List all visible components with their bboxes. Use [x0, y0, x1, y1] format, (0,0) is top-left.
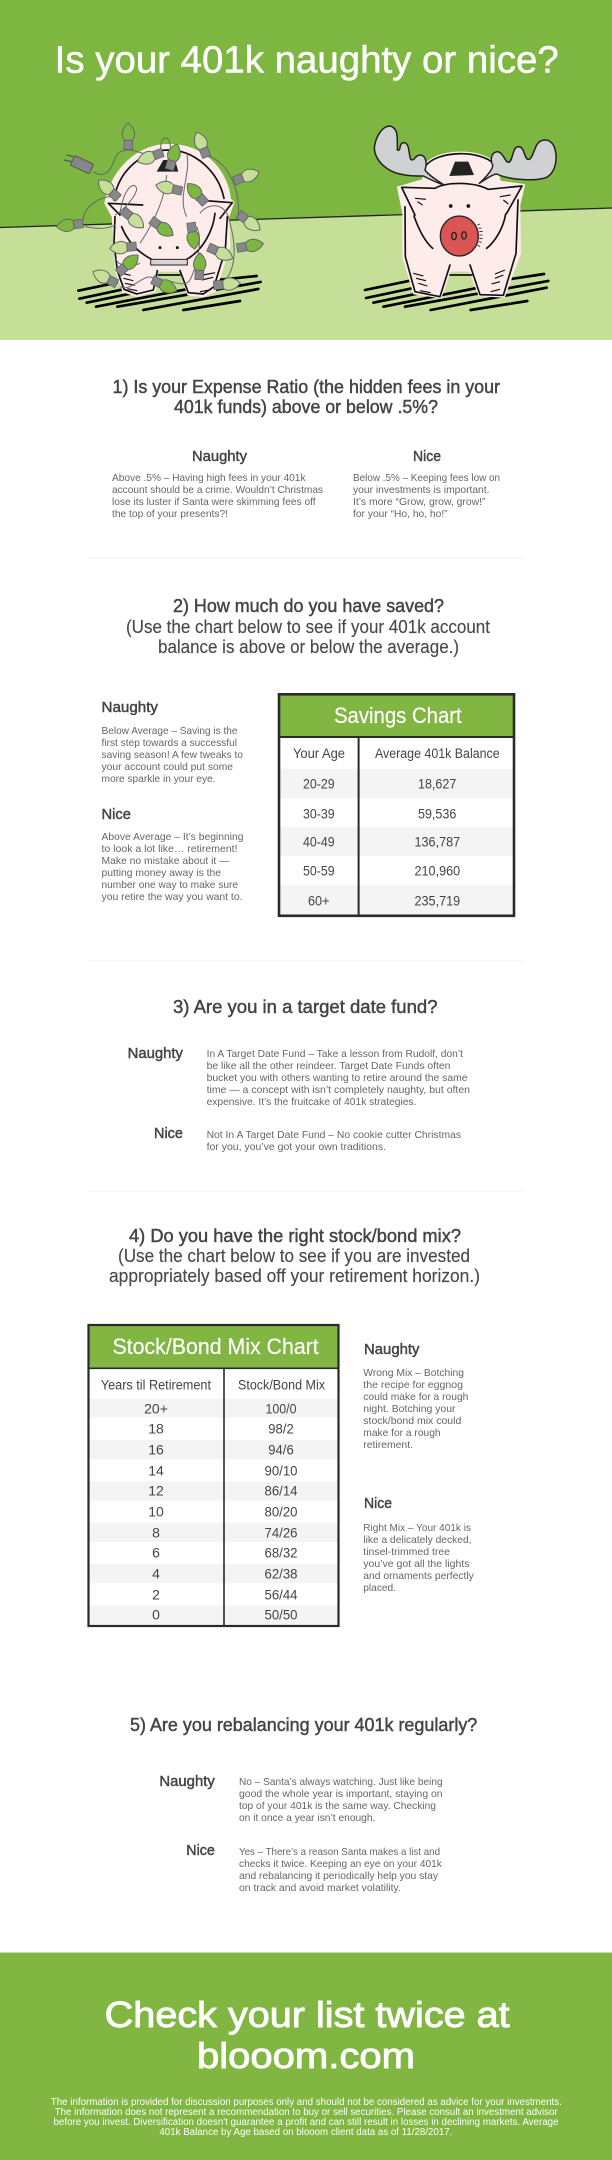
icon: piggy bank reindeer (nice) — [365, 126, 556, 310]
savings chart table: 50-59 — [303, 863, 335, 879]
light wires — [83, 138, 238, 288]
savings chart table: 210,960 — [414, 863, 460, 879]
naughty text: make for a rough — [363, 1428, 441, 1439]
naughty row: In A Target Date Fund – Take a lesson from Rudolf, don’t — [207, 1049, 463, 1060]
shadow hatching — [78, 276, 261, 310]
heading 4: (Use the chart below to see if you are invested — [118, 1245, 470, 1266]
section 2 — [102, 595, 514, 916]
savings chart table — [278, 694, 514, 916]
stock/bond mix chart table: 2 — [152, 1587, 160, 1603]
heading 1: 1) Is your Expense Ratio (the hidden fees in your — [112, 376, 500, 397]
heading 4: 4) Do you have the right stock/bond mix? — [129, 1225, 461, 1246]
call to action — [105, 1994, 510, 2076]
savings chart table: Savings Chart — [334, 703, 462, 728]
stock/bond mix chart table: Stock/Bond Mix — [238, 1378, 325, 1392]
naughty text: the top of your presents?! — [112, 509, 228, 520]
naughty text — [112, 449, 323, 520]
naughty text — [102, 700, 243, 785]
savings chart table: 30-39 — [303, 806, 335, 822]
stock/bond mix chart table: 62/38 — [264, 1566, 298, 1582]
nice text — [363, 1496, 475, 1594]
stock/bond mix chart table: 80/20 — [264, 1504, 298, 1520]
icon: piggy bank tangled in string lights (naughty) — [56, 123, 264, 310]
nice text: to look a lot like… retirement! — [102, 844, 238, 855]
naughty row: good the whole year is important, staying on — [239, 1789, 443, 1800]
title: Is your 401k naughty or nice? — [55, 40, 559, 82]
nice row: on track and avoid market volatility. — [239, 1883, 401, 1894]
heading 2: 2) How much do you have saved? — [173, 595, 444, 616]
call to action: Check your list twice at — [105, 1994, 510, 2035]
stock/bond mix chart table — [88, 1325, 339, 1626]
stock/bond mix chart table: 90/10 — [264, 1463, 298, 1479]
naughty text — [363, 1342, 469, 1451]
stock/bond mix chart table: 56/44 — [264, 1587, 298, 1603]
stock/bond mix chart table: 94/6 — [268, 1442, 294, 1458]
disclaimer: The information is provided for discussion purposes only and should not be considered as advice for your investments. — [51, 2097, 562, 2108]
nice row: and rebalancing it periodically help you stay — [239, 1871, 439, 1882]
naughty text: night. Botching your — [363, 1404, 456, 1415]
nice row: for you, you’ve got your own traditions. — [207, 1142, 386, 1153]
stock/bond mix chart table: 68/32 — [264, 1545, 298, 1561]
stock/bond mix chart table: 16 — [148, 1442, 164, 1458]
nice row — [186, 1843, 443, 1894]
stock/bond mix chart table: 86/14 — [264, 1483, 298, 1499]
section 3 — [128, 996, 470, 1153]
heading 5: 5) Are you rebalancing your 401k regularly? — [130, 1714, 477, 1735]
naughty text: more sparkle in your eye. — [102, 774, 216, 785]
naughty text: first step towards a successful — [102, 738, 237, 749]
stock/bond mix chart table: 8 — [152, 1525, 160, 1541]
call to action: blooom.com — [197, 2035, 415, 2076]
nice text: Above Average – It’s beginning — [102, 832, 244, 843]
nice text — [353, 449, 500, 520]
naughty text: lose its luster if Santa were skimming fees off — [112, 497, 316, 508]
nice row: Nice — [186, 1843, 215, 1859]
nice text: and ornaments perfectly — [363, 1571, 475, 1582]
savings chart table: 136,787 — [414, 834, 460, 850]
stock/bond mix chart table: 10 — [148, 1504, 164, 1520]
floor — [0, 208, 612, 340]
naughty text: Above .5% – Having high fees in your 401k — [112, 473, 306, 484]
heading 1: 401k funds) above or below .5%? — [174, 396, 438, 417]
nice text: for your “Ho, ho, ho!” — [353, 509, 448, 520]
nice text: Make no mistake about it — — [102, 856, 230, 867]
pig body — [398, 152, 524, 297]
stock/bond mix chart table: 20+ — [144, 1401, 168, 1417]
naughty row: be like all the other reindeer. Target Date Funds often — [207, 1061, 451, 1072]
nice text: Right Mix – Your 401k is — [363, 1523, 471, 1534]
naughty row: bucket you with others wanting to retire around the same — [207, 1073, 468, 1084]
savings chart table: 18,627 — [418, 776, 456, 792]
stock/bond mix chart table: 50/50 — [264, 1607, 298, 1623]
naughty row: on it once a year isn’t enough. — [239, 1813, 375, 1824]
plug — [64, 155, 94, 174]
naughty text: retirement. — [363, 1440, 413, 1451]
naughty row: time — a concept with isn’t completely naughty, but often — [207, 1085, 470, 1096]
savings chart table: 40-49 — [303, 834, 335, 850]
stock/bond mix chart table: 14 — [148, 1463, 164, 1479]
shadow hatching — [365, 274, 548, 310]
savings chart table: 60+ — [308, 893, 330, 909]
nice text: you retire the way you want to. — [102, 892, 242, 903]
antlers — [374, 126, 556, 185]
disclaimer — [51, 2097, 562, 2138]
nice text: Below .5% – Keeping fees low on — [353, 473, 500, 484]
naughty row — [128, 1046, 470, 1108]
nice text: Nice — [413, 449, 441, 465]
nice text: Nice — [102, 807, 131, 823]
nice text: like a delicately decked, — [363, 1535, 472, 1546]
naughty row: No – Santa’s always watching. Just like being — [239, 1777, 443, 1788]
stock/bond mix chart table: 0 — [152, 1607, 160, 1623]
disclaimer: 401k Balance by Age based on blooom client data as of 11/28/2017. — [159, 2127, 452, 2138]
header panel — [0, 0, 612, 340]
naughty text: could make for a rough — [363, 1392, 469, 1403]
savings chart table: 235,719 — [414, 893, 460, 909]
stock/bond mix chart table: 74/26 — [264, 1525, 298, 1541]
naughty text: Below Average – Saving is the — [102, 726, 238, 737]
nice text: Nice — [364, 1496, 392, 1512]
naughty row: top of your 401k is the same way. Checking — [239, 1801, 436, 1812]
naughty row: Naughty — [128, 1046, 184, 1062]
naughty text: Naughty — [102, 700, 159, 716]
bulbs — [56, 123, 264, 297]
nice row: checks it twice. Keeping an eye on your 401k — [239, 1859, 443, 1870]
nice text — [102, 807, 244, 903]
stock/bond mix chart table: 100/0 — [266, 1401, 297, 1417]
heading 1 — [112, 376, 500, 417]
stock/bond mix chart table: 12 — [148, 1483, 164, 1499]
section 4 — [88, 1225, 480, 1626]
stock/bond mix chart table: Years til Retirement — [101, 1378, 211, 1392]
pig body — [105, 145, 233, 296]
nice text: number one way to make sure — [102, 880, 238, 891]
section 1 — [112, 376, 500, 520]
naughty text: stock/bond mix could — [363, 1416, 462, 1427]
nice text: you’ve got all the lights — [363, 1559, 470, 1570]
naughty text: Wrong Mix – Botching — [363, 1368, 464, 1379]
nice text: It’s more “Grow, grow, grow!” — [353, 497, 486, 508]
savings chart table: Your Age — [293, 746, 345, 761]
savings chart table: 20-29 — [303, 776, 335, 792]
nice text: your investments is important. — [353, 485, 490, 496]
stock/bond mix chart table: 6 — [152, 1545, 160, 1561]
naughty text: the recipe for eggnog — [363, 1380, 463, 1391]
footer panel — [0, 1952, 612, 2160]
nice row: Yes – There’s a reason Santa makes a list and — [239, 1847, 440, 1858]
naughty text: your account could put some — [102, 762, 233, 773]
stock/bond mix chart table: 98/2 — [268, 1421, 294, 1437]
nice row: Not In A Target Date Fund – No cookie cutter Christmas — [207, 1130, 461, 1141]
nice text: putting money away is the — [102, 868, 221, 879]
heading 4 — [109, 1225, 480, 1286]
naughty row: Naughty — [159, 1774, 216, 1790]
savings chart table: Average 401k Balance — [375, 746, 500, 761]
naughty text: Naughty — [364, 1342, 420, 1358]
nice text: placed. — [363, 1583, 396, 1594]
disclaimer: before you invest. Diversification doesn't guarantee a profit and can still result in losses in declining markets. Average — [54, 2117, 559, 2128]
disclaimer: The information does not represent a recommendation to buy or sell securities. Please consult an investment advisor — [55, 2107, 558, 2118]
nice row — [154, 1126, 461, 1153]
naughty text: saving season! A few tweaks to — [102, 750, 243, 761]
heading 2: balance is above or below the average.) — [158, 636, 459, 657]
naughty row: expensive. It’s the fruitcake of 401k strategies. — [207, 1097, 416, 1108]
heading 3: 3) Are you in a target date fund? — [173, 996, 438, 1017]
section 5 — [130, 1714, 477, 1894]
stock/bond mix chart table: Stock/Bond Mix Chart — [112, 1334, 319, 1359]
savings chart table: 59,536 — [418, 806, 456, 822]
naughty text: account should be a crime. Wouldn’t Christmas — [112, 485, 323, 496]
stock/bond mix chart table: 4 — [152, 1566, 160, 1582]
heading 4: appropriately based off your retirement horizon.) — [109, 1265, 480, 1286]
stock/bond mix chart table: 18 — [148, 1421, 164, 1437]
naughty row — [159, 1774, 443, 1824]
red nose — [440, 216, 483, 256]
naughty text: Naughty — [192, 449, 248, 465]
nice text: tinsel-trimmed tree — [363, 1547, 450, 1558]
heading 2 — [126, 595, 491, 657]
nice row: Nice — [154, 1126, 183, 1142]
heading 2: (Use the chart below to see if your 401k account — [126, 616, 491, 637]
